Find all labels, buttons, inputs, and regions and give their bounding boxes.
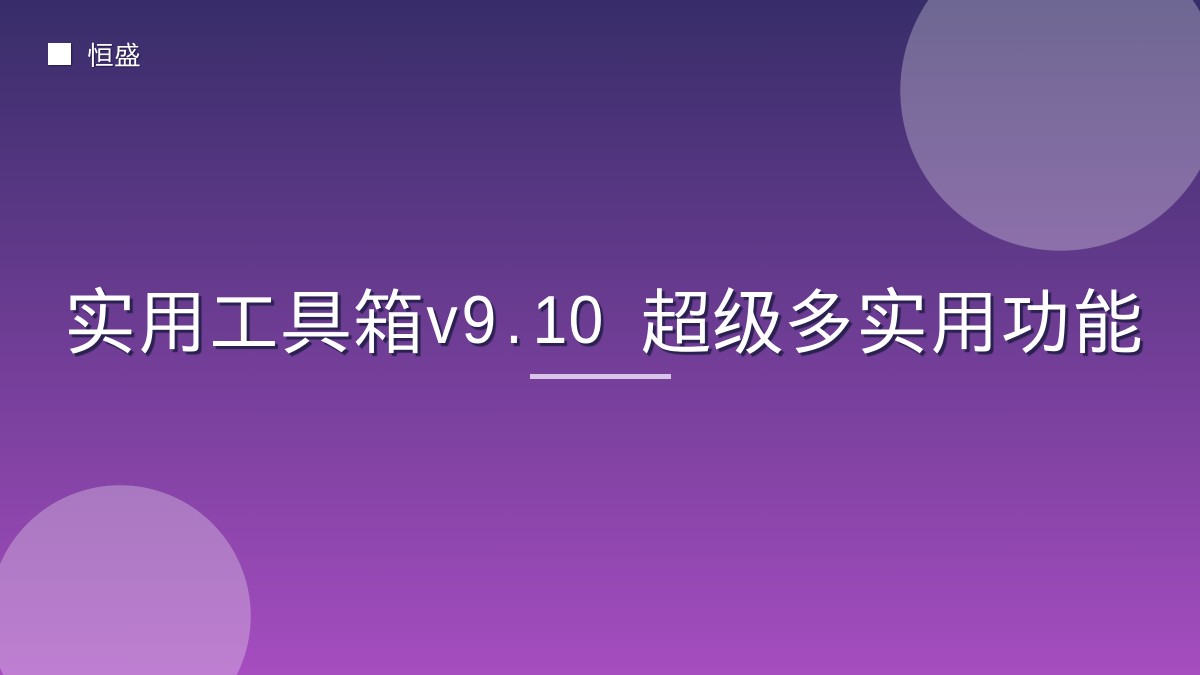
- decorative circle: top right: [900, 0, 1200, 251]
- title: v: [426, 282, 458, 358]
- title: 0: [568, 282, 603, 358]
- icon: white square: [48, 43, 71, 65]
- title underline: [530, 374, 671, 379]
- title: 实用工具箱 超级多实用功能: [64, 285, 1144, 357]
- title: 1: [532, 282, 567, 358]
- brand label with square icon: [48, 42, 141, 69]
- brand name: 恒盛: [87, 42, 141, 69]
- title: .: [505, 282, 523, 358]
- title: 9: [461, 282, 496, 358]
- decorative circle: bottom left: [0, 485, 251, 675]
